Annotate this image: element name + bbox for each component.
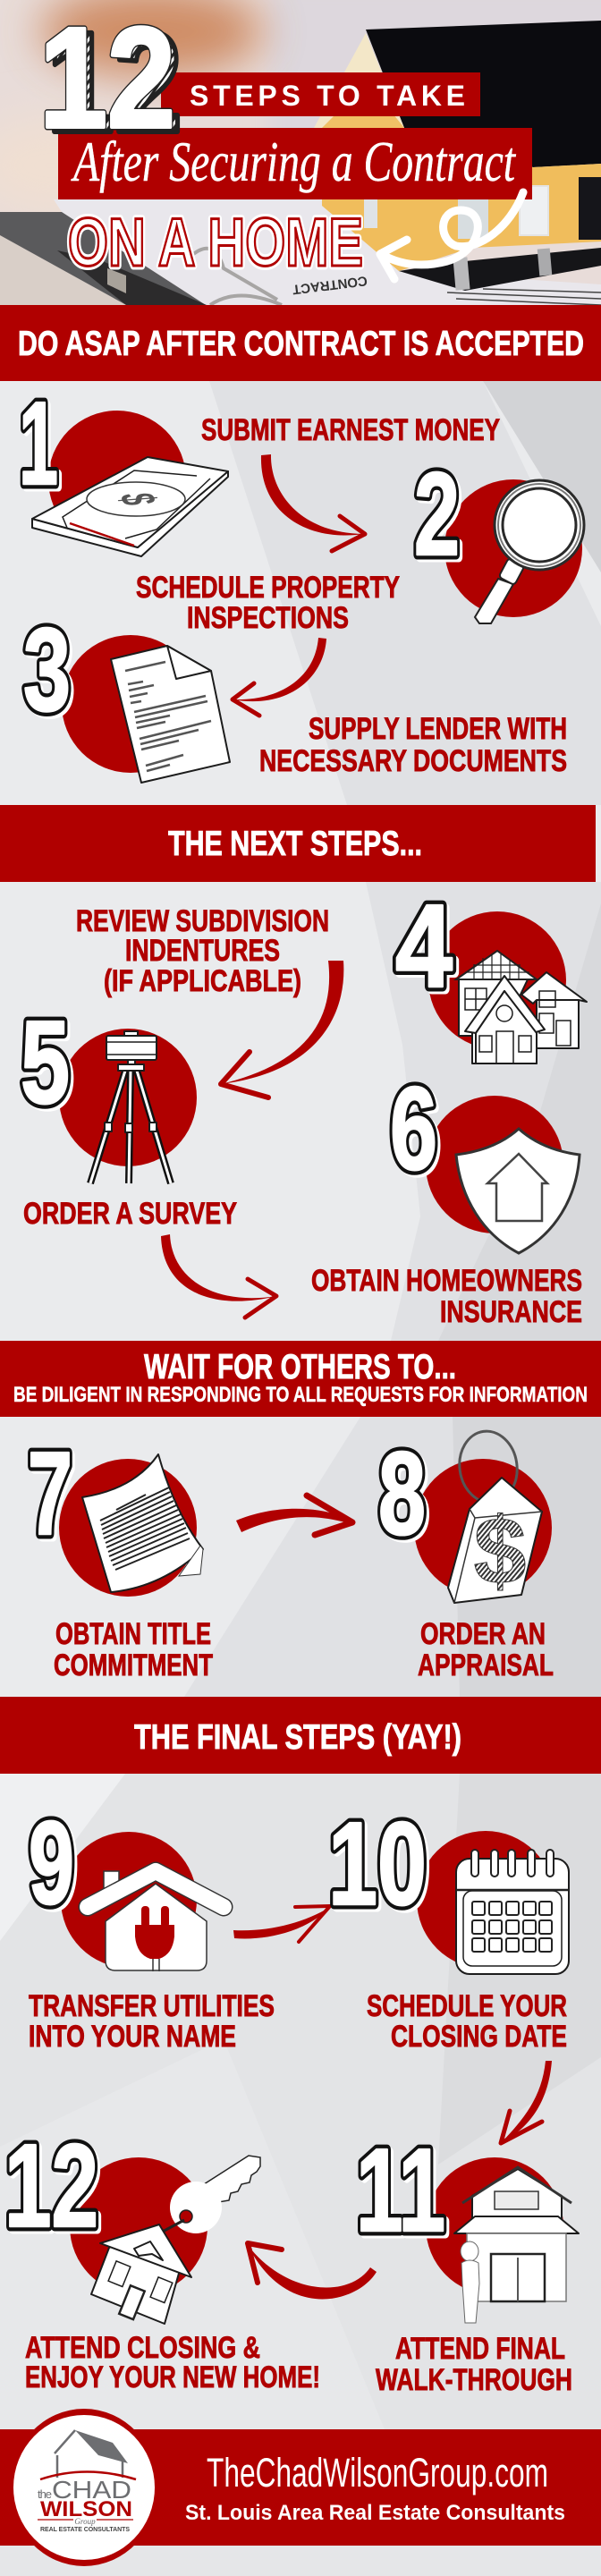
step 9 bbox=[29, 1797, 275, 2054]
number 10: 10 bbox=[328, 1798, 427, 1929]
step 7 bbox=[28, 1428, 213, 1682]
number 1: 1 bbox=[19, 377, 58, 509]
title: on a home: ON A HOME bbox=[68, 205, 363, 281]
number 2 bbox=[414, 448, 460, 580]
footer band bbox=[0, 2429, 601, 2546]
label: ENJOY YOUR NEW HOME! bbox=[25, 2360, 320, 2394]
arrow 2 to 3 bbox=[233, 638, 326, 716]
number 3: 3 bbox=[23, 604, 71, 735]
number 11: 11 bbox=[356, 2124, 445, 2256]
title: on a home: ON A HOME bbox=[68, 205, 363, 281]
number 4: 4 bbox=[395, 880, 453, 1012]
label bbox=[376, 2332, 572, 2397]
number 1: 1 bbox=[19, 377, 58, 509]
clipboard bbox=[0, 212, 282, 305]
icon: title paper bbox=[82, 1454, 203, 1592]
number 6: 6 bbox=[390, 1063, 437, 1194]
label: INTO YOUR NAME bbox=[29, 2020, 236, 2054]
label bbox=[54, 1617, 213, 1682]
heading: the final steps: THE FINAL STEPS (YAY!) bbox=[134, 1718, 461, 1757]
label: OBTAIN TITLE bbox=[55, 1617, 211, 1651]
step label: review subdivision: REVIEW SUBDIVISION bbox=[76, 904, 329, 938]
step label: review subdivision: (IF APPLICABLE) bbox=[104, 964, 301, 998]
label bbox=[418, 1617, 554, 1682]
number 1 bbox=[19, 377, 58, 509]
title number 12: 12 bbox=[39, 0, 175, 157]
logo bbox=[10, 2409, 158, 2566]
label bbox=[311, 1264, 582, 1329]
step 4 bbox=[395, 880, 587, 1063]
number 8: 8 bbox=[378, 1428, 426, 1559]
step 6 bbox=[311, 1063, 582, 1329]
icon: house with person bbox=[454, 2167, 579, 2323]
title band: steps to take bbox=[161, 72, 480, 116]
number 3: 3 bbox=[23, 604, 71, 735]
step 12 bbox=[4, 2120, 320, 2394]
house gable bbox=[314, 33, 404, 128]
document lines bbox=[447, 289, 601, 305]
number 11: 11 bbox=[356, 2124, 445, 2256]
logo wordmark: CHAD bbox=[52, 2476, 131, 2504]
icon: document bbox=[111, 646, 230, 783]
house walls bbox=[322, 128, 601, 271]
step 10 bbox=[328, 1798, 569, 2054]
title band: steps to take: STEPS TO TAKE bbox=[190, 80, 465, 112]
contract small text: CONTRACT bbox=[292, 273, 368, 297]
logo wordmark: WILSON bbox=[40, 2497, 132, 2521]
icon: price tag: $ bbox=[474, 1498, 526, 1604]
pen bbox=[399, 248, 601, 291]
label: ORDER A SURVEY bbox=[23, 1197, 237, 1231]
label: ATTEND CLOSING & bbox=[25, 2331, 260, 2365]
icon: house with plug bbox=[88, 1871, 224, 1971]
heading: wait for others: WAIT FOR OTHERS TO... bbox=[144, 1348, 456, 1386]
label bbox=[25, 2331, 320, 2394]
step 1 bbox=[19, 377, 500, 556]
number 6: 6 bbox=[390, 1063, 437, 1194]
label bbox=[136, 571, 400, 635]
arrow 5 to 6 bbox=[161, 1234, 276, 1318]
icon: money stack bbox=[32, 457, 228, 556]
arrow 10 to 11 bbox=[501, 2061, 552, 2143]
icon: shield with house bbox=[456, 1129, 580, 1253]
number 2: 2 bbox=[414, 448, 460, 580]
icon: white swirl arrow bbox=[380, 192, 523, 279]
label: INSPECTIONS bbox=[187, 601, 349, 635]
house roof bbox=[366, 21, 601, 167]
number 10: 10 bbox=[328, 1798, 427, 1929]
tagline: St. Louis Area Real Estate Consultants bbox=[185, 2501, 565, 2525]
logo wordmark: the bbox=[38, 2487, 52, 2501]
step 8 bbox=[378, 1428, 554, 1682]
contract paper bbox=[54, 199, 601, 305]
number 7: 7 bbox=[28, 1428, 72, 1559]
icon: key and house tag bbox=[91, 2156, 260, 2324]
heading: the final steps bbox=[0, 1697, 601, 1774]
number 4: 4 bbox=[395, 880, 453, 1012]
logo wordmark bbox=[38, 2476, 133, 2533]
number 9: 9 bbox=[29, 1797, 74, 1928]
number 9: 9 bbox=[29, 1797, 74, 1928]
arrow 1 to 2 bbox=[261, 454, 365, 551]
arrow 11 to 12 bbox=[248, 2243, 377, 2299]
logo wordmark: REAL ESTATE CONSULTANTS bbox=[40, 2527, 130, 2533]
step label: review subdivision bbox=[76, 904, 329, 998]
heading: wait for others bbox=[0, 1341, 601, 1417]
number 5: 5 bbox=[21, 996, 70, 1128]
heading: do asap bbox=[0, 305, 601, 381]
number 5: 5 bbox=[21, 996, 70, 1128]
label: APPRAISAL bbox=[418, 1648, 554, 1682]
label bbox=[367, 1989, 567, 2054]
step label: review subdivision: INDENTURES bbox=[125, 934, 280, 968]
icon: houses bbox=[456, 951, 587, 1063]
number 8: 8 bbox=[378, 1428, 426, 1559]
icon: calendar bbox=[456, 1850, 569, 1974]
heading: the next steps bbox=[0, 805, 596, 882]
hero photo background bbox=[0, 0, 601, 305]
icon: magnifying glass bbox=[475, 480, 584, 623]
number 9 bbox=[29, 1797, 74, 1928]
logo wordmark: Group bbox=[74, 2517, 96, 2526]
label bbox=[29, 1989, 275, 2054]
logo house bbox=[40, 2430, 136, 2479]
step 11 bbox=[356, 2124, 579, 2397]
arrow 4 to 5 bbox=[221, 961, 343, 1097]
step 3 bbox=[23, 604, 567, 783]
icon: price tag bbox=[448, 1428, 542, 1604]
label: COMMITMENT bbox=[54, 1648, 213, 1682]
heading: the next steps: THE NEXT STEPS... bbox=[168, 825, 422, 863]
number 7 bbox=[28, 1428, 72, 1559]
icon: survey tripod bbox=[90, 1031, 171, 1183]
house windows bbox=[364, 177, 601, 240]
title number 12: 12 bbox=[47, 2, 182, 162]
title bbox=[39, 0, 532, 281]
icon: money stack: $ bbox=[109, 491, 167, 507]
label: ORDER AN bbox=[420, 1617, 546, 1651]
label: TRANSFER UTILITIES bbox=[29, 1989, 275, 2023]
number 12: 12 bbox=[4, 2120, 98, 2251]
label bbox=[259, 712, 567, 778]
number 7: 7 bbox=[28, 1428, 72, 1559]
number 2: 2 bbox=[414, 448, 460, 580]
label: SCHEDULE PROPERTY bbox=[136, 571, 400, 605]
number 12: 12 bbox=[4, 2120, 98, 2251]
step 5 bbox=[21, 996, 237, 1231]
arrow 9 to 10 bbox=[233, 1906, 330, 1942]
arrow 7 to 8 bbox=[236, 1496, 354, 1535]
label: SUBMIT EARNEST MONEY bbox=[201, 413, 500, 447]
step 2 bbox=[136, 448, 584, 635]
title number 12: 12 bbox=[39, 0, 175, 157]
